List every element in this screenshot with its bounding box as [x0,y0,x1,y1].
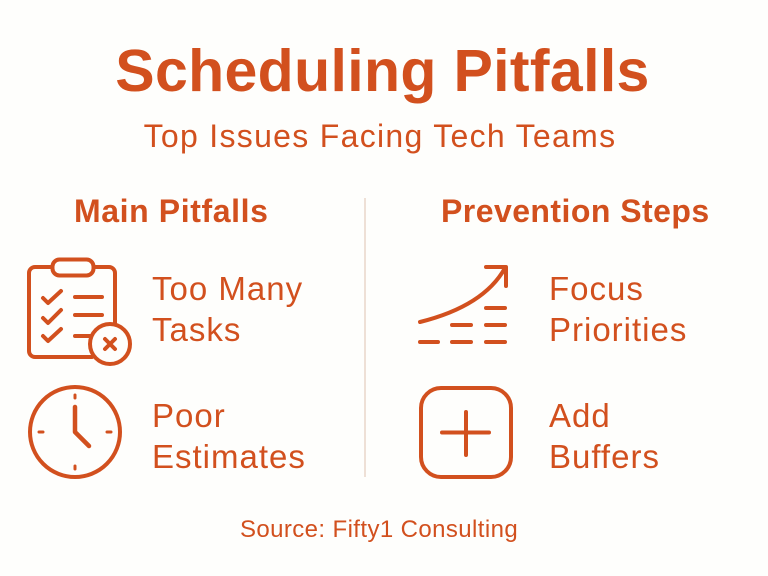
label: add buffers [549,397,660,475]
label: poor estimates [152,397,306,475]
icon: rising arrow with dashes [420,267,506,342]
label: too many tasks [152,270,303,348]
label: focus priorities: Focus [549,270,644,307]
icon: clock [30,387,120,477]
icon: plus in rounded square [421,388,511,477]
label: poor estimates: Poor [152,397,226,434]
label: focus priorities [549,270,687,348]
label: poor estimates: Estimates [152,438,306,475]
heading: prevention steps: Prevention Steps [441,193,710,229]
source: Source: Fifty1 Consulting [240,516,518,543]
title: Scheduling Pitfalls [115,38,650,104]
subtitle: Top Issues Facing Tech Teams [144,118,616,154]
label: add buffers: Buffers [549,438,660,475]
heading: main pitfalls: Main Pitfalls [74,193,269,229]
label: add buffers: Add [549,397,611,434]
icon: clipboard with checks and x [29,260,130,364]
label: focus priorities: Priorities [549,311,687,348]
label: too many tasks: Tasks [152,311,241,348]
label: too many tasks: Too Many [152,270,303,307]
